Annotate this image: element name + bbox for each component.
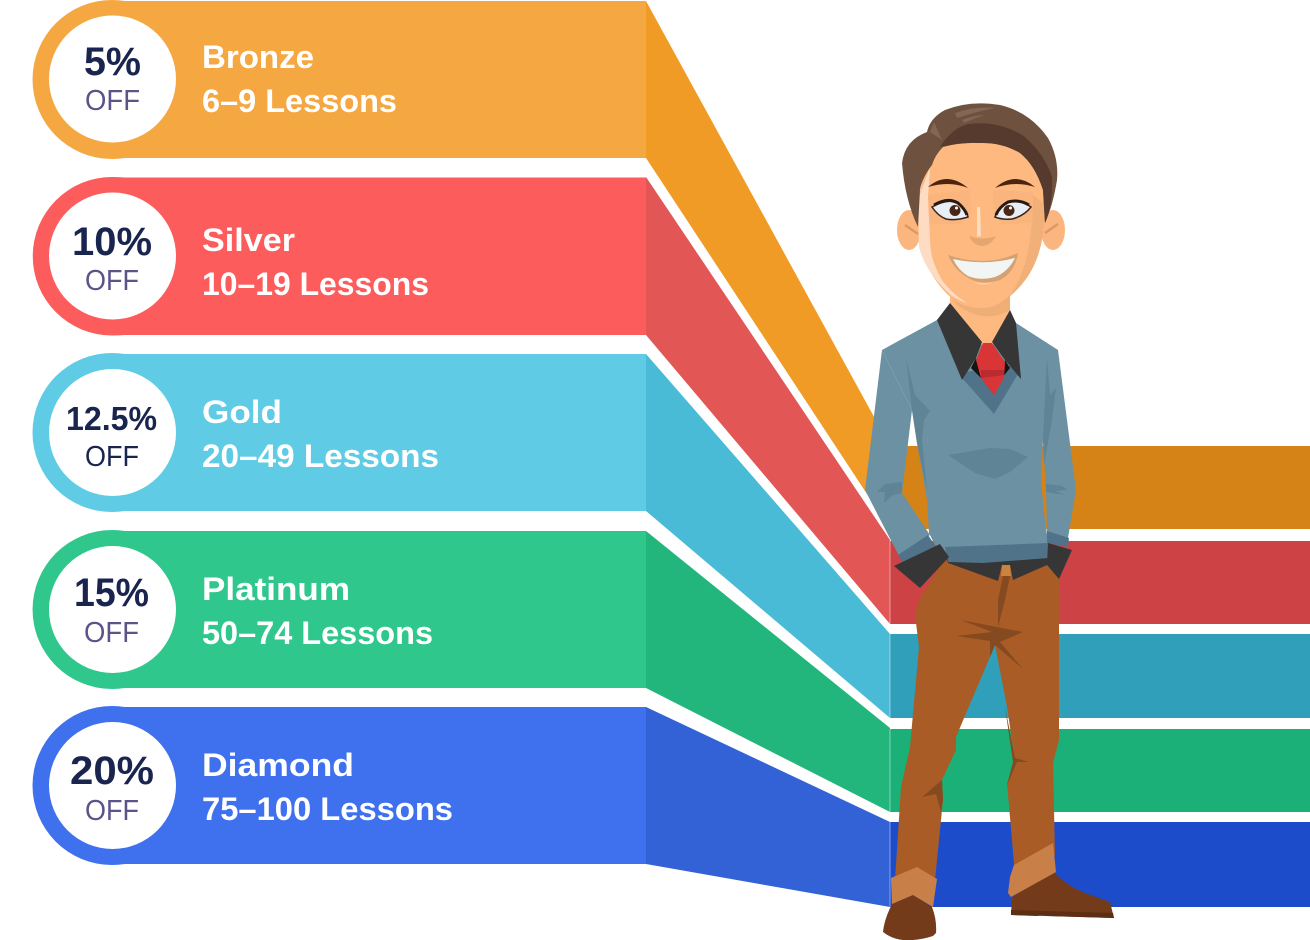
- trouser cuffs: [891, 843, 1056, 907]
- tier: Bronze: [33, 0, 1310, 529]
- badge: 5% off: OFF: [85, 85, 140, 117]
- smile: [948, 253, 1018, 284]
- label: Diamond 75-100 lessons: [202, 747, 453, 827]
- necktie: [971, 343, 1010, 395]
- eyebrows: [928, 179, 1035, 188]
- sweater: [865, 320, 1076, 566]
- shirt hem: [945, 550, 1049, 581]
- ribbon: bronze back band: [890, 446, 1310, 529]
- label: Diamond 75-100 lessons: Diamond: [202, 747, 354, 783]
- ribbon: silver back band: [890, 541, 1310, 624]
- ribbon: diamond front band: [32, 706, 646, 865]
- ribbon: platinum fold: [646, 531, 890, 812]
- badge: 12.5% off: 12.5%: [66, 400, 157, 437]
- fold edge highlight: [890, 541, 891, 907]
- shoes: [883, 871, 1114, 940]
- badge: 15% off: 15%: [74, 571, 149, 615]
- label: Silver 10-19 lessons: Silver: [202, 222, 295, 258]
- ribbon: bronze front band: [33, 0, 646, 159]
- trousers: [895, 555, 1059, 880]
- badge: 10% off: OFF: [85, 265, 139, 297]
- badge: 12.5% off: [49, 369, 176, 496]
- ribbon: gold front band: [32, 353, 646, 512]
- label: Platinum 50-74 lessons: [202, 571, 433, 651]
- tier: Silver: [33, 177, 1310, 624]
- badge: 15% off: OFF: [84, 617, 139, 649]
- neck: [950, 290, 1010, 345]
- label: Gold 20-49 lessons: [202, 394, 439, 474]
- face: [918, 140, 1045, 308]
- label: Bronze 6-9 lessons: [202, 39, 397, 119]
- neck shadow: [952, 293, 1010, 316]
- badge: 20% off: [49, 722, 176, 849]
- badge: 10% off: 10%: [72, 220, 152, 264]
- label: Bronze 6-9 lessons: 6–9 Lessons: [202, 83, 397, 119]
- label: Gold 20-49 lessons: 20–49 Lessons: [202, 438, 439, 474]
- badge: 5% off: 5%: [84, 40, 141, 84]
- collar: [937, 303, 1021, 380]
- label: Silver 10-19 lessons: [202, 222, 429, 302]
- ribbon: diamond fold: [646, 707, 890, 907]
- ribbon: silver fold: [646, 177, 890, 624]
- ribbon: platinum back band: [890, 729, 1310, 812]
- label: Bronze 6-9 lessons: Bronze: [202, 39, 314, 75]
- badge: 12.5% off: OFF: [85, 441, 139, 473]
- badge: 10% off: [49, 192, 176, 320]
- ribbon: gold back band: [890, 634, 1310, 718]
- label: Silver 10-19 lessons: 10–19 Lessons: [202, 266, 429, 302]
- belt buckle: [1001, 565, 1011, 576]
- label: Platinum 50-74 lessons: Platinum: [202, 571, 350, 607]
- ribbon: silver front band: [33, 177, 646, 336]
- badge: 20% off: OFF: [85, 795, 139, 827]
- badge: 20% off: 20%: [70, 749, 154, 793]
- face shading: [918, 167, 1045, 303]
- tier: Platinum: [33, 530, 1310, 812]
- eyes: [932, 200, 1031, 220]
- label: Gold 20-49 lessons: Gold: [202, 394, 282, 430]
- badge: 5% off: [49, 16, 176, 142]
- ears: [897, 210, 1065, 250]
- nose: [969, 207, 996, 246]
- label: Diamond 75-100 lessons: 75–100 Lessons: [202, 791, 453, 827]
- tier: Gold: [32, 353, 1310, 718]
- ribbon: platinum front band: [33, 530, 646, 689]
- hair: [902, 103, 1057, 227]
- tier: Diamond: [32, 706, 1310, 907]
- shirt cuffs: [894, 543, 1072, 588]
- ribbon: gold fold: [646, 354, 890, 718]
- illustration: smiling man: [865, 103, 1114, 940]
- badge: 15% off: [49, 546, 176, 673]
- ribbon: diamond back band: [890, 822, 1310, 907]
- label: Platinum 50-74 lessons: 50–74 Lessons: [202, 615, 433, 651]
- ribbon: bronze fold: [646, 1, 890, 529]
